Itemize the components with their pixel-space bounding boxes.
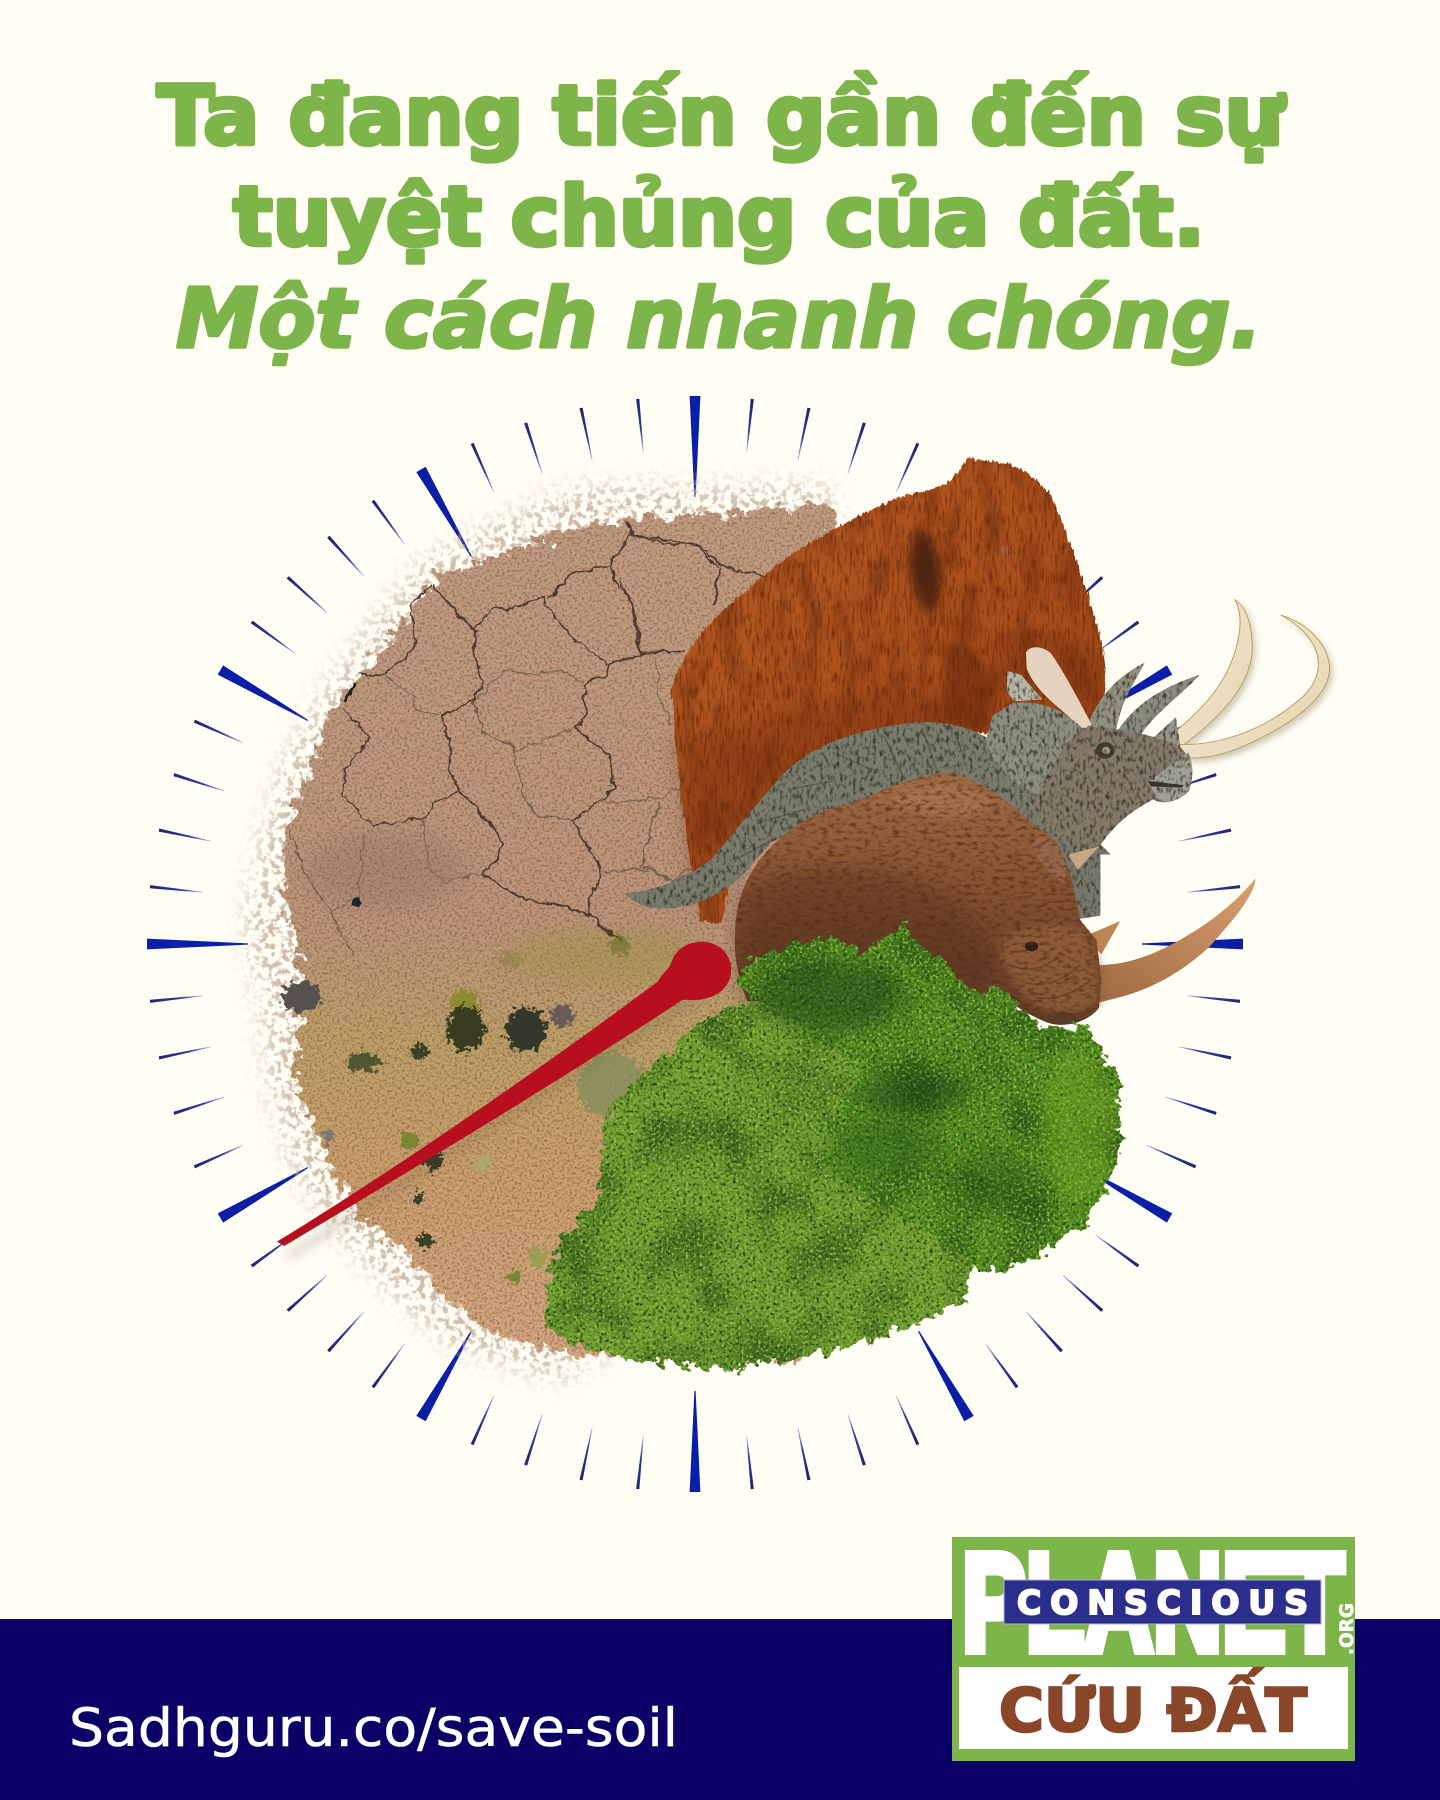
triceratops horns xyxy=(1085,663,1145,734)
triceratops beak xyxy=(1148,752,1192,801)
upper long tusk xyxy=(1172,600,1252,746)
soil cracks xyxy=(288,524,717,958)
green vegetation xyxy=(547,920,1120,1368)
mammoth xyxy=(672,457,1106,924)
triceratops xyxy=(625,663,1199,920)
triceratops skin folds xyxy=(738,728,964,859)
soil dust fringe xyxy=(245,486,860,1380)
rhino main horn xyxy=(1087,878,1256,1006)
rhino head shade xyxy=(998,925,1099,1014)
rhino ear xyxy=(1033,836,1066,883)
bushes on dry soil xyxy=(281,935,646,1284)
logo white box xyxy=(959,1667,1348,1749)
body lower shade xyxy=(677,691,950,920)
gauge tick marks xyxy=(147,396,1243,1492)
gauge needle xyxy=(277,942,731,1260)
rhino eye xyxy=(1025,941,1038,951)
upper right soil cracks xyxy=(620,522,766,881)
triceratops frill xyxy=(986,702,1092,795)
canopy light and dark patches xyxy=(759,960,1114,1213)
grass field xyxy=(547,987,985,1368)
mammoth near tusk xyxy=(1026,647,1092,728)
logo: Planet Conscious Cứu Đất xyxy=(952,1526,1358,1761)
olive tint on lower soil xyxy=(510,927,710,983)
logo .ORG: .ORG xyxy=(1336,1603,1358,1655)
triceratops body and tail xyxy=(625,722,1111,909)
rhino nostril muzzle xyxy=(1046,1012,1076,1024)
head shade xyxy=(988,630,1101,716)
footer band xyxy=(0,1619,1440,1800)
logo words CỨU ĐẤT: CỨU ĐẤT xyxy=(999,1667,1307,1746)
cracked and dry soil xyxy=(283,505,900,1360)
tree canopy xyxy=(740,920,1120,1273)
woolly rhinoceros xyxy=(735,772,1101,1025)
rhino shading flank xyxy=(737,868,998,997)
title line 3 italic: Một cách nhanh chóng. xyxy=(176,272,1262,367)
footer url: Sadhguru.co/save-soil xyxy=(69,1698,678,1759)
shoulder fold shadow xyxy=(909,528,941,613)
rhino horns xyxy=(1068,846,1256,1006)
chest shadow xyxy=(944,642,993,732)
long mammoth tusks xyxy=(1172,600,1329,758)
title xyxy=(157,69,1287,367)
logo green frame xyxy=(952,1537,1355,1761)
rhino head wrinkles xyxy=(1012,957,1090,998)
rhino rear ear xyxy=(1068,846,1099,870)
title line 2: tuyệt chủng của đất. xyxy=(233,170,1205,265)
lower long tusk xyxy=(1177,615,1329,758)
triceratops eye xyxy=(1096,742,1115,759)
triceratops head xyxy=(1035,727,1192,852)
rhino highlight xyxy=(884,786,993,816)
rhino body xyxy=(735,772,1101,1025)
title line 1: Ta đang tiến gần đến sự xyxy=(157,69,1287,164)
logo band xyxy=(1004,1580,1321,1624)
rhino small horn xyxy=(1085,921,1120,955)
darker soil patch xyxy=(305,830,465,910)
mammoth eye xyxy=(1000,545,1012,553)
mammoth body xyxy=(672,457,1106,924)
logo word CONSCIOUS: CONSCIOUS xyxy=(1017,1583,1308,1622)
triceratops lower leg xyxy=(1045,838,1100,920)
soil disc xyxy=(245,486,900,1380)
